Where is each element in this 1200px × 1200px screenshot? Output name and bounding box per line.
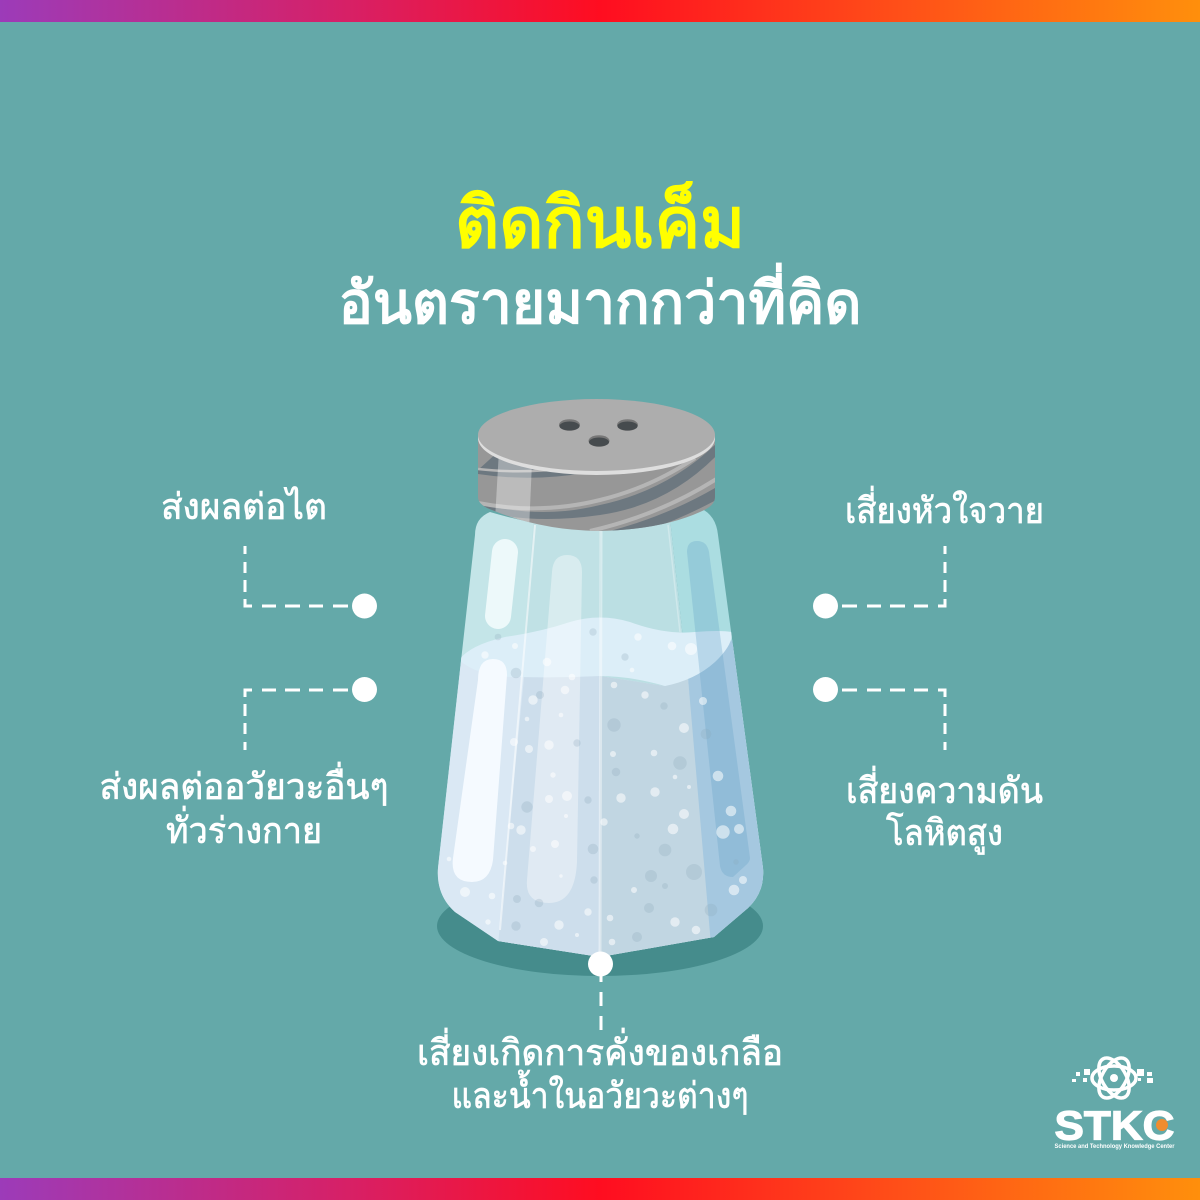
label line 1 and 2: และน้ำในอวัยวะต่างๆ (452, 1069, 748, 1116)
glass jar (438, 510, 764, 956)
shaker shadow (437, 876, 763, 976)
title: ติดกินเค็ม (455, 180, 745, 262)
cap rim (478, 401, 715, 475)
label: ส่งผลต่อไต (161, 486, 327, 527)
left highlight lower (453, 659, 507, 882)
cap highlight (496, 458, 532, 522)
right shaded strip (687, 541, 750, 877)
cap stripes light (478, 458, 718, 531)
connector (245, 690, 348, 750)
label: เสี่ยงหัวใจวาย (845, 486, 1044, 531)
icon: atom (1092, 1053, 1136, 1103)
dot (588, 952, 613, 976)
salt surface (459, 618, 732, 686)
upper glass facets (438, 510, 764, 956)
bottom gradient bar (0, 1178, 1200, 1200)
hole 2 (617, 419, 638, 431)
connector (245, 546, 348, 606)
lower salt-filled facets (438, 640, 764, 956)
label line 1 and 2: เสี่ยงความดัน (846, 766, 1043, 811)
salt grains dark (495, 628, 739, 942)
label line 1 and 2: เสี่ยงเกิดการคั่งของเกลือ (417, 1028, 783, 1073)
callout: high blood pressure (813, 677, 1043, 855)
callout: heart failure (813, 486, 1044, 618)
wordmark: STKC (1054, 1102, 1174, 1148)
tagline: Science and Technology Knowledge Center (1054, 1144, 1175, 1150)
metal cap (478, 399, 715, 531)
top gradient bar (0, 0, 1200, 22)
callout: other organs (100, 677, 388, 851)
label line 1 and 2: ส่งผลต่ออวัยวะอื่นๆ (100, 762, 388, 807)
connector (842, 690, 945, 750)
label line 1 and 2: ทั่วร่างกาย (166, 806, 322, 851)
cap side (478, 439, 715, 531)
facet lines (500, 525, 680, 958)
label line 1 and 2: โลหิตสูง (886, 812, 1003, 855)
connector (600, 976, 602, 1030)
icon: pixels (1072, 1069, 1153, 1083)
callout: liver (161, 486, 377, 618)
label line 1 and 2 (100, 762, 388, 851)
salt grains light (447, 633, 747, 946)
illustration: salt shaker (430, 399, 780, 980)
logo: STKC (1054, 1053, 1175, 1150)
hole 3 (588, 435, 610, 447)
cap top (478, 399, 715, 471)
cap stripes dark (478, 445, 715, 530)
callout: salt and water retention (417, 952, 783, 1116)
label line 1 and 2 (417, 1028, 783, 1116)
middle highlight (527, 555, 582, 903)
dot (813, 677, 838, 702)
label line 1 and 2 (846, 766, 1043, 855)
orange dot (1156, 1119, 1168, 1131)
hole 1 (559, 419, 580, 431)
left highlight upper (498, 552, 505, 616)
connector (842, 546, 945, 606)
dot (352, 677, 377, 702)
dot (813, 594, 838, 618)
subtitle: อันตรายมากกว่าที่คิด (338, 262, 862, 336)
dot (352, 594, 377, 618)
